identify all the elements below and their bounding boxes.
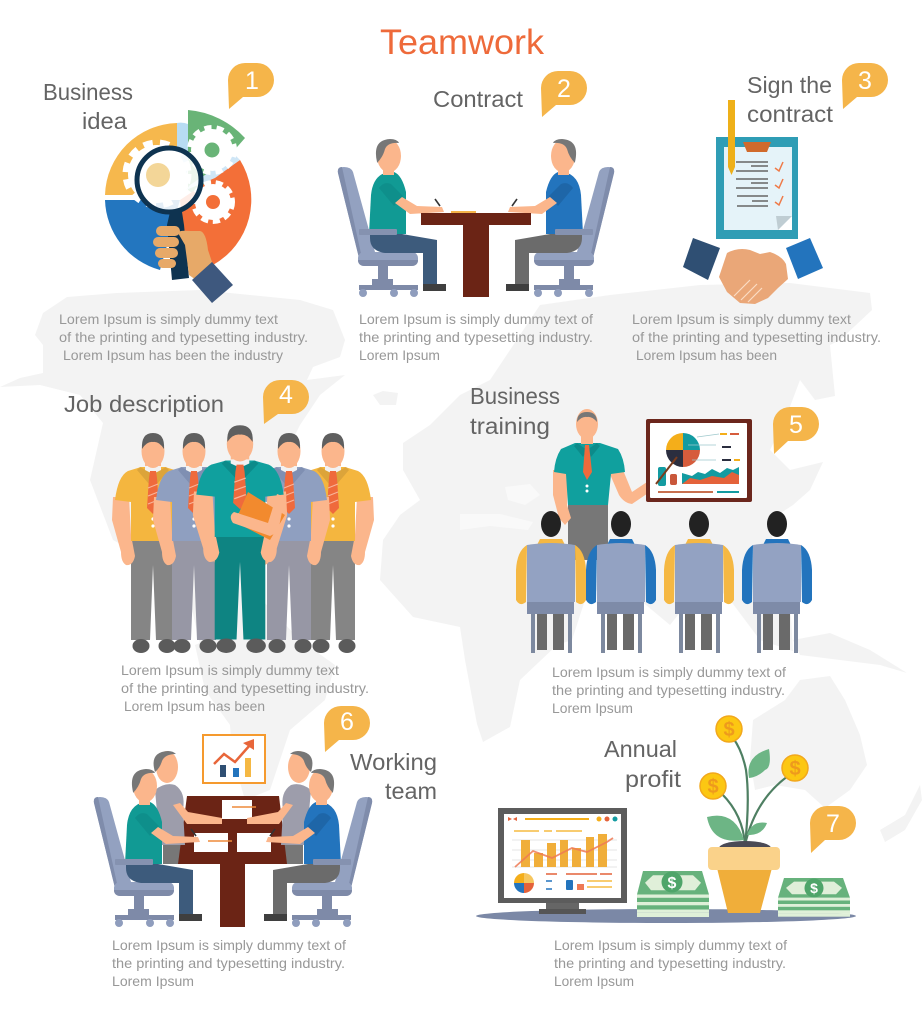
heading: Sign the contract: contract	[747, 101, 834, 127]
badge 2: 2	[557, 75, 571, 103]
text: business training: Lorem Ipsum is simply dummy text of	[552, 664, 786, 680]
badge 4: 4	[279, 381, 293, 409]
heading: Business idea	[43, 79, 133, 134]
text: business idea	[59, 311, 308, 363]
title: Teamwork	[380, 23, 545, 62]
text: annual profit	[554, 937, 787, 989]
text: working team: Lorem Ipsum	[112, 973, 194, 989]
text: annual profit: Lorem Ipsum is simply dummy text of	[554, 937, 787, 953]
text: business idea: Lorem Ipsum has been the industry	[63, 347, 283, 363]
text: sign the contract: Lorem Ipsum has been	[636, 347, 777, 363]
seated blue man	[264, 769, 372, 927]
illustration: annual profit	[476, 716, 856, 923]
money plant: $	[723, 719, 735, 741]
heading: Business training	[470, 383, 560, 439]
badge 7: 7	[826, 810, 840, 838]
badge 6: 6	[340, 708, 354, 736]
ground	[476, 909, 856, 923]
text: job description	[121, 662, 369, 714]
wall chart	[203, 735, 265, 783]
badge 1: 1	[245, 67, 259, 95]
text: job description: of the printing and typesetting industry.	[121, 680, 369, 696]
heading: Working team: team	[385, 778, 437, 804]
money plant: $	[789, 758, 801, 780]
badge 3	[842, 63, 888, 109]
text: contract: Lorem Ipsum is simply dummy text of	[359, 311, 593, 327]
text: working team: Lorem Ipsum is simply dummy text of	[112, 937, 346, 953]
flower pot	[708, 841, 780, 913]
heading: Working team: Working	[350, 749, 437, 775]
rear trousers	[163, 843, 303, 864]
text: contract: Lorem Ipsum	[359, 347, 440, 363]
money plant	[700, 716, 808, 845]
cash stack left: $	[668, 875, 677, 892]
text: business training: Lorem Ipsum	[552, 700, 633, 716]
heading: Contract: Contract	[433, 86, 524, 112]
cash stack right: $	[810, 880, 818, 896]
text: business idea: Lorem Ipsum is simply dummy text	[59, 311, 278, 327]
badge 4	[263, 380, 309, 424]
text: sign the contract: of the printing and typesetting industry.	[632, 329, 881, 345]
badge 3: 3	[858, 67, 872, 95]
cash stack right	[778, 878, 850, 917]
trainer	[553, 409, 657, 560]
text: business idea: of the printing and typesetting industry.	[59, 329, 308, 345]
rear colleagues	[154, 751, 312, 845]
text: annual profit: the printing and typesetting industry.	[554, 955, 786, 971]
illustration: team of five	[112, 425, 374, 653]
money plant: $	[707, 776, 719, 798]
seated teal man	[94, 769, 202, 927]
background: world map	[0, 283, 922, 842]
text: contract: the printing and typesetting industry.	[359, 329, 593, 345]
icon: clipboard and handshake	[683, 100, 823, 304]
heading: Sign the contract	[747, 72, 834, 127]
icon: business idea gears and magnifier	[105, 110, 251, 303]
text: annual profit: Lorem Ipsum	[554, 973, 634, 989]
text: job description: Lorem Ipsum is simply dummy text	[121, 662, 339, 678]
heading: Business training: Business	[470, 383, 560, 409]
text: working team: the printing and typesetting industry.	[112, 955, 345, 971]
heading: Working team	[350, 749, 437, 804]
heading: Business idea: idea	[82, 108, 127, 134]
badge 5: 5	[789, 411, 803, 439]
text: business training: the printing and typesetting industry.	[552, 682, 785, 698]
heading: Business training: training	[470, 413, 550, 439]
text: working team	[112, 937, 346, 989]
presentation board	[646, 419, 752, 502]
text: sign the contract: Lorem Ipsum is simply dummy text	[632, 311, 851, 327]
heading: Job description: Job description	[64, 391, 224, 417]
monitor	[498, 808, 627, 914]
badge 6	[324, 706, 370, 752]
badge 5	[773, 407, 819, 454]
heading: Sign the contract: Sign the	[747, 72, 832, 98]
illustration: contract meeting	[338, 139, 614, 297]
badge 7	[810, 806, 856, 853]
illustration: trainer and audience	[516, 409, 812, 653]
heading: Annual profit: profit	[625, 766, 682, 792]
illustration: working team	[94, 735, 372, 927]
meeting table	[178, 796, 287, 927]
heading: Annual profit: Annual	[604, 736, 677, 762]
text: sign the contract	[632, 311, 881, 363]
cash stack left	[637, 871, 709, 917]
badge 1	[228, 63, 274, 109]
text: business training	[552, 664, 786, 716]
badge 2	[541, 71, 587, 117]
heading: Annual profit	[604, 736, 682, 792]
heading: Business idea: Business	[43, 79, 133, 105]
text: contract	[359, 311, 593, 363]
text: job description: Lorem Ipsum has been	[124, 698, 265, 714]
